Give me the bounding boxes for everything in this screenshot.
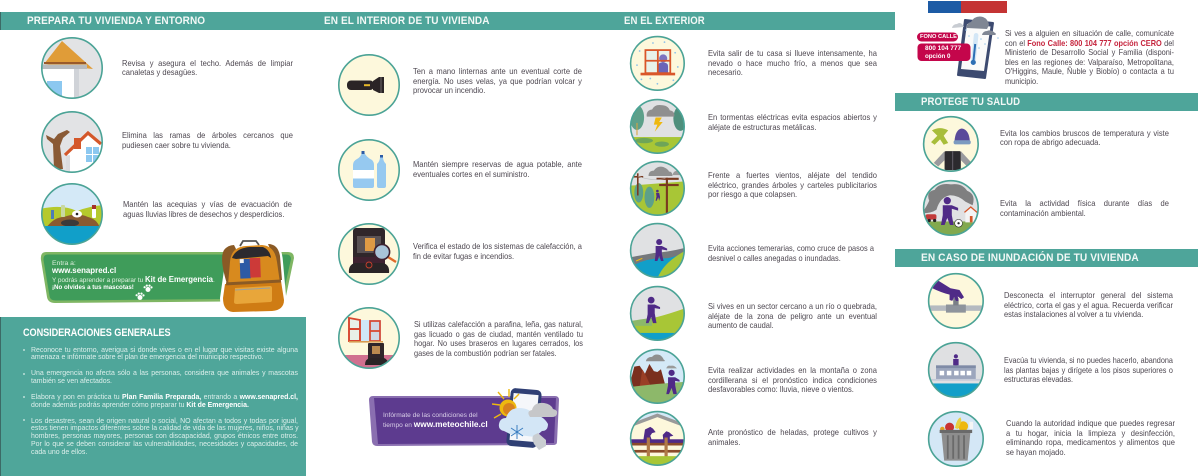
text: tree branches: pudiesen caer sobre tu vivienda. [122, 140, 231, 150]
text: meteochile copy: Infórmate de las condiciones del [383, 412, 478, 419]
text: reckless crossing [708, 243, 874, 263]
text: fono calle: bles en las regiones de: Valparaíso, Metropolitana, [1005, 57, 1174, 67]
panel: right column [895, 1, 1198, 467]
text: reckless crossing: desnivel o calles anegadas o inundadas. [708, 253, 840, 263]
text: frost [708, 427, 877, 447]
text: mountain: cordillerana si el pronóstico indica condiciones [708, 375, 876, 385]
text: bullets: hombres, personas mayores, personas con discapacidad, grupos étnicos entre otros. [31, 433, 298, 440]
text: bullets: amenaza e infórmate sobre el plan de emergencia del municipio respectivo. [31, 354, 264, 361]
text: switch off [1004, 290, 1173, 319]
text: heating check: Verifica el estado de los sistemas de calefacción, a [412, 241, 581, 251]
text: bullets: donde además podrás aprender cómo preparar tu Kit de Emergencia. [31, 402, 249, 409]
text: roof: Revisa y asegura el techo. Además de limpiar [122, 58, 293, 68]
text: bullets: estos tienen impactos diferentes sobre la calidad de vida de las mujeres, niños, niñas y [31, 425, 299, 432]
text: water: Mantén siempre reservas de agua potable, ante [413, 159, 582, 169]
icon: roof and gutter [41, 37, 103, 99]
icon: lightning storm [630, 98, 685, 154]
text: fono calle badge: opción 0 [925, 52, 950, 60]
text: bullets: Por lo que se deben considerar las vulnerabilidades, necesidades y capacidades, de [31, 441, 298, 448]
text: heating check: fin de evitar fugas e incendios. [412, 251, 514, 261]
icon: backpack [220, 240, 286, 312]
text: bullets: Los desastres, sean de origen natural o social, NO afectan a todos y todas por igual, [31, 418, 298, 425]
icon: flashlight [338, 54, 400, 116]
text: flashlight [413, 66, 582, 95]
text: water: eventuales cortes en el suministro. [413, 169, 529, 179]
text: frost: Ante pronóstico de heladas, protege cultivos y [708, 427, 876, 437]
text: fono calle: con el Fono Calle: 800 104 777 opción CERO del [1005, 38, 1174, 48]
text: river: aumento de caudal. [708, 320, 773, 330]
text: ventilation: hogar. No uses braseros en lugares cerrados, los [414, 338, 583, 348]
text: reckless crossing: Evita acciones temerarias, como cruce de pasos a [708, 243, 873, 253]
icon: paw prints [136, 284, 153, 300]
text: bullets: cada uno de ellos. [31, 449, 87, 456]
icon: chilean flag bar [928, 1, 1007, 13]
text: banner copy: Entra a: [52, 260, 76, 266]
heading: en el interior: EN EL INTERIOR DE TU VIVIENDA [324, 15, 490, 27]
text: cleaning: a tu hogar, inicia la limpieza y desinfección, [1006, 428, 1175, 438]
banner: kit de emergencia [40, 240, 294, 312]
icon: hand closing valve [928, 272, 984, 329]
text: evacuate: Evacúa tu vivienda, si no puedes hacerlo, abandona [1004, 356, 1173, 365]
text: banner copy: ¡No olvides a tus mascotas! [52, 284, 134, 291]
icon: air pollution [922, 180, 979, 236]
text: river [708, 301, 876, 330]
heading: protege tu salud: PROTEGE TU SALUD [921, 96, 1020, 108]
text: fono calle: O'Higgins, Maule, Ñuble y Biobío) o contacta a tu [1005, 66, 1174, 76]
text: mountain: desfavorables como: lluvia, nieve o vientos. [708, 384, 853, 394]
text: cleaning: se hayan mojado. [1006, 447, 1066, 457]
text: meteochile copy [383, 412, 488, 429]
icon: fono calle phone and badge [917, 16, 999, 79]
text: rain: necesario. [708, 67, 743, 77]
heading: en el interior [306, 12, 600, 30]
text: wind: Frente a fuertes vientos, aléjate del tendido [708, 170, 877, 180]
text: rain: Evita salir de tu casa si llueve intensamente, ha [708, 48, 877, 58]
text: fono calle: Ministerio de Desarrollo Social y Familia (disponi- [1005, 47, 1174, 57]
text: cleaning: eliminando ropa, medicamentos y alimentos que [1006, 437, 1175, 447]
text: bullets [31, 346, 299, 456]
text: wind [708, 170, 877, 199]
text: roof [122, 58, 293, 77]
icon: evacuation to roof [928, 342, 984, 398]
icon: warm clothing [922, 116, 979, 172]
text: pollution: Evita la actividad física durante días de [1000, 198, 1169, 208]
text: ditches: Mantén las acequias y vías de evacuación de [122, 199, 291, 209]
text: clothing: con ropa de abrigo adecuada. [1000, 137, 1100, 147]
text: tree branches [122, 130, 293, 150]
text: cleaning: Cuando la autoridad indique que puedes regresar [1006, 418, 1175, 428]
text: rain: nevado o hace mucho frío, a menos que sea [708, 58, 877, 68]
text: flashlight: provocar un incendio. [413, 85, 485, 95]
text: ventilation: gases de la combustión podrían ser fatales. [414, 348, 557, 358]
panel: consideraciones generales [0, 317, 306, 476]
heading: en caso de inundación: EN CASO DE INUNDACIÓN DE TU VIVIENDA [921, 252, 1139, 264]
text: meteochile copy: tiempo en www.meteochile.cl [383, 419, 488, 429]
text: ventilation: gas licuado o gas de ciudad, mantén ventilado tu [414, 329, 583, 339]
text: fono calle: municipio. [1005, 76, 1038, 86]
text: clothing: Evita los cambios bruscos de temperatura y viste [1000, 128, 1169, 138]
text: banner copy: www.senapred.cl [52, 266, 116, 275]
icon: water bottles [338, 139, 400, 201]
icon: tree and house [41, 111, 103, 173]
icon: sheltered horses [630, 410, 685, 466]
text: river: aléjate de la zona de peligro ante un eventual [708, 311, 876, 321]
bullets [23, 349, 25, 421]
text: wind: por riesgo a que colapsen. [708, 189, 797, 199]
heading: prepara tu vivienda y entorno [0, 12, 306, 30]
text: mountain: Evita realizar actividades en la montaña o zona [708, 365, 876, 375]
text: clothing [1000, 128, 1169, 147]
text: river: Si vives en un sector cercano a un río o quebrada, [708, 301, 876, 311]
text: bullets: Una emergencia no afecta sólo a las personas, considera que animales y mascotas [31, 370, 298, 377]
text: flashlight: energía. No uses velas, ya que podrían volcar y [413, 76, 582, 86]
banner: meteochile [369, 388, 559, 450]
icon: flooded road crossing [630, 222, 685, 278]
text: fono calle: Si ves a alguien en situación de calle, comunícate [1005, 28, 1174, 38]
text: heating check [412, 241, 582, 261]
text: water [413, 159, 582, 179]
text: bullets: Elabora y pon en práctica tu Plan Familia Preparada, entrando a www.senapred.cl, [31, 394, 298, 401]
text: tree branches: Elimina las ramas de árboles cercanos que [122, 130, 293, 140]
text: fono calle [1005, 28, 1174, 86]
text: evacuate [1004, 356, 1173, 384]
icon: mountains [630, 348, 685, 404]
icon: window with rain [630, 36, 685, 91]
text: fono calle badge [920, 34, 961, 60]
heading: en caso de inundación [895, 248, 1198, 266]
heading: consideraciones generales: CONSIDERACIONES GENERALES [23, 326, 171, 338]
text: evacuate: estructuras elevadas. [1004, 375, 1073, 384]
heading: prepara tu vivienda y entorno: PREPARA TU VIVIENDA Y ENTORNO [27, 15, 205, 27]
panel: en el interior de tu vivienda [306, 12, 600, 450]
text: switch off: eléctrico, corta el gas y el agua. Recuerda verificar [1004, 300, 1173, 310]
heading: en el exterior: EN EL EXTERIOR [624, 15, 705, 27]
text: banner copy: Y podrás aprender a preparar tu Kit de Emergencia. [52, 274, 215, 284]
panel: en el exterior [600, 12, 895, 466]
panel: prepara tu vivienda y entorno [0, 12, 306, 312]
text: flashlight: Ten a mano linternas ante un eventual corte de [413, 66, 582, 76]
text: pollution [1000, 198, 1169, 218]
text: switch off: estas instalaciones al volver a tu vivienda. [1004, 309, 1144, 319]
text: fono calle badge: 800 104 777 [925, 45, 961, 52]
text: storm [708, 112, 877, 132]
text: mountain [708, 365, 877, 394]
text: storm: aléjate de estructuras metálicas. [708, 122, 816, 132]
text: wind: eléctrico, grandes árboles y carteles publicitarios [708, 180, 877, 190]
text: banner copy [52, 260, 215, 291]
text: roof: canaletas y desagües. [122, 67, 197, 77]
text: frost: animales. [708, 437, 740, 447]
icon: strong winds [630, 160, 685, 216]
icon: trash can with food [928, 410, 984, 467]
text: cleaning [1006, 418, 1175, 457]
text: rain [708, 48, 877, 77]
text: switch off: Desconecta el interruptor general del sistema [1004, 290, 1173, 300]
text: fono calle badge: FONO CALLE [920, 34, 957, 40]
icon: ventilated window and heater [338, 307, 400, 369]
heading: protege tu salud [895, 92, 1198, 110]
icon: person by river [630, 286, 685, 341]
text: ditches: aguas lluvias libres de desechos y desperdicios. [122, 209, 284, 219]
text: ventilation [414, 319, 583, 358]
heading: en el exterior [600, 12, 895, 30]
icon: ditch with debris [41, 183, 103, 245]
text: evacuate: las plantas bajas y dirígete a los pisos superiores o [1004, 366, 1173, 375]
text: bullets: también se ven afectados. [31, 378, 112, 385]
icon: heater with magnifier [338, 223, 400, 285]
text: ditches [122, 199, 292, 219]
text: bullets: Reconoce tu entorno, averigua si donde vives o en el lugar que visitas existe alguna [31, 346, 298, 354]
text: storm: En tormentas eléctricas evita espacios abiertos y [708, 112, 876, 122]
text: pollution: contaminación ambiental. [1000, 208, 1086, 218]
text: ventilation: Si utilizas calefacción a parafina, leña, gas natural, [414, 319, 583, 329]
icon: phone with weather [492, 388, 558, 450]
